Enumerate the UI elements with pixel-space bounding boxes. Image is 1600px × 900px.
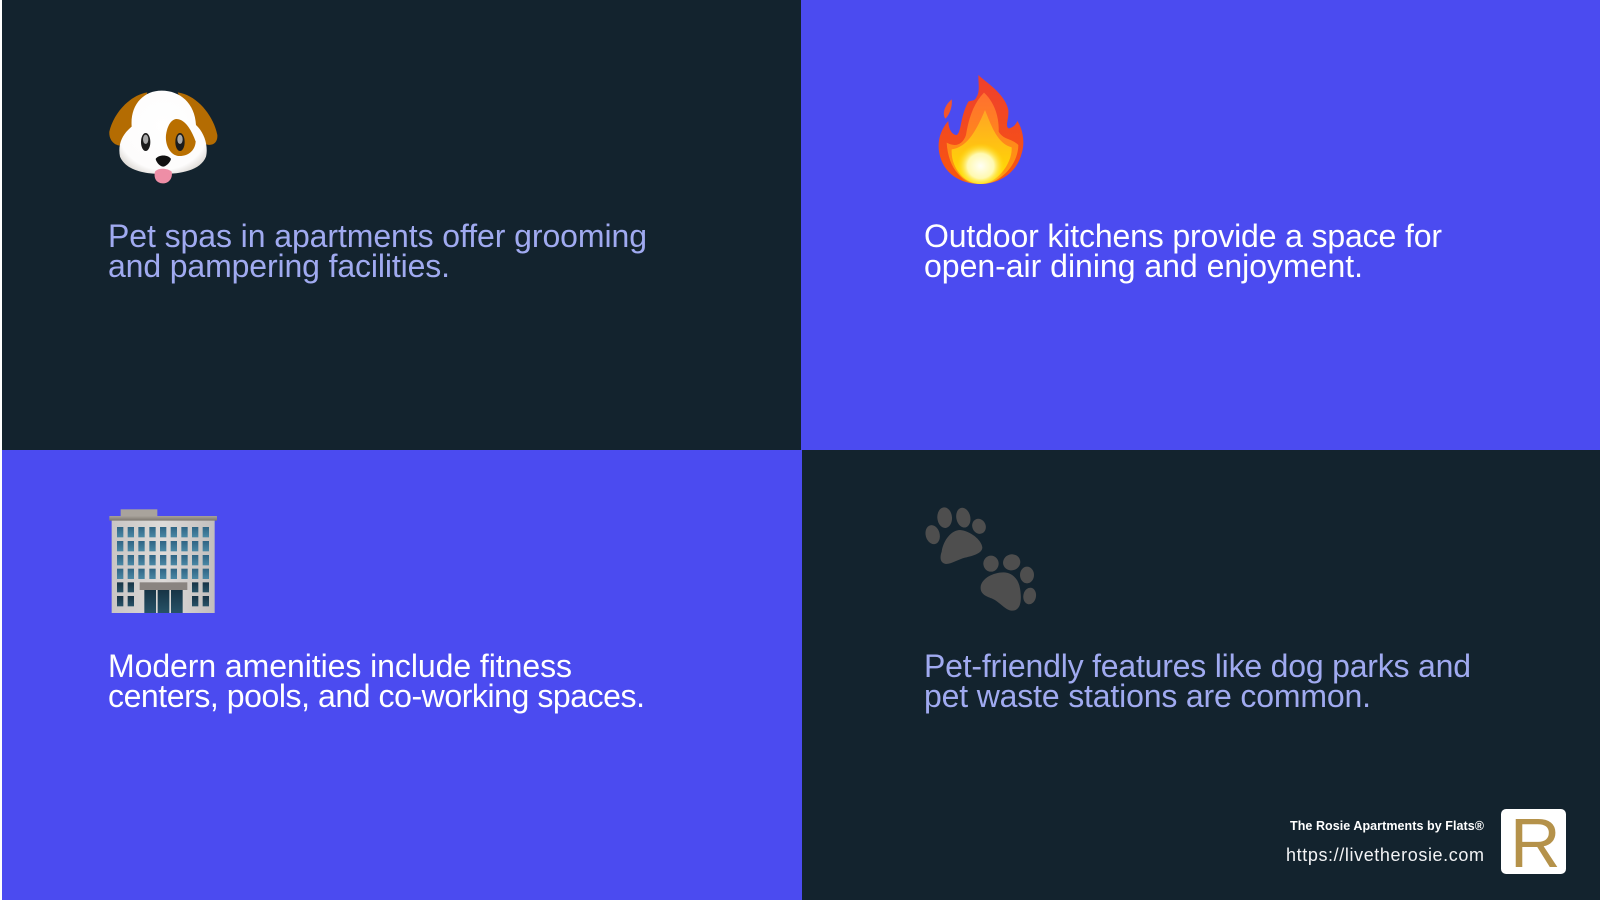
- icon: fire: [939, 75, 1023, 189]
- text: pet-friendly features: pet waste stations are common.: [924, 678, 1371, 714]
- text: pet spas: [108, 218, 647, 284]
- icon: office building: [109, 509, 217, 613]
- left edge strip: [0, 0, 2, 900]
- panel: background blue top-right: [801, 0, 1600, 450]
- panel: background blue bottom-left: [0, 450, 802, 900]
- footer: brand name: The Rosie Apartments by Flats®: [1290, 819, 1485, 833]
- text: pet-friendly features: Pet-friendly features like dog parks and: [924, 648, 1471, 684]
- text: modern amenities: centers, pools, and co-working spaces.: [108, 678, 645, 714]
- text: modern amenities: [108, 648, 645, 714]
- icon: dog face: [109, 91, 217, 183]
- panel: background dark bottom-right: [802, 450, 1600, 900]
- text: pet spas: Pet spas in apartments offer grooming: [108, 218, 647, 254]
- text: modern amenities: Modern amenities include fitness: [108, 648, 572, 684]
- text: pet-friendly features: [924, 648, 1471, 714]
- panel: background dark top-left: [0, 0, 801, 450]
- text: pet spas: and pampering facilities.: [108, 248, 450, 284]
- text: outdoor kitchens: [924, 218, 1442, 284]
- text: outdoor kitchens: open-air dining and enjoyment.: [924, 248, 1363, 284]
- footer: website url: https://livetherosie.com: [1286, 845, 1484, 865]
- text: outdoor kitchens: Outdoor kitchens provide a space for: [924, 218, 1442, 254]
- icon: paw prints: [923, 506, 1037, 611]
- logo: R badge: R: [1510, 804, 1561, 882]
